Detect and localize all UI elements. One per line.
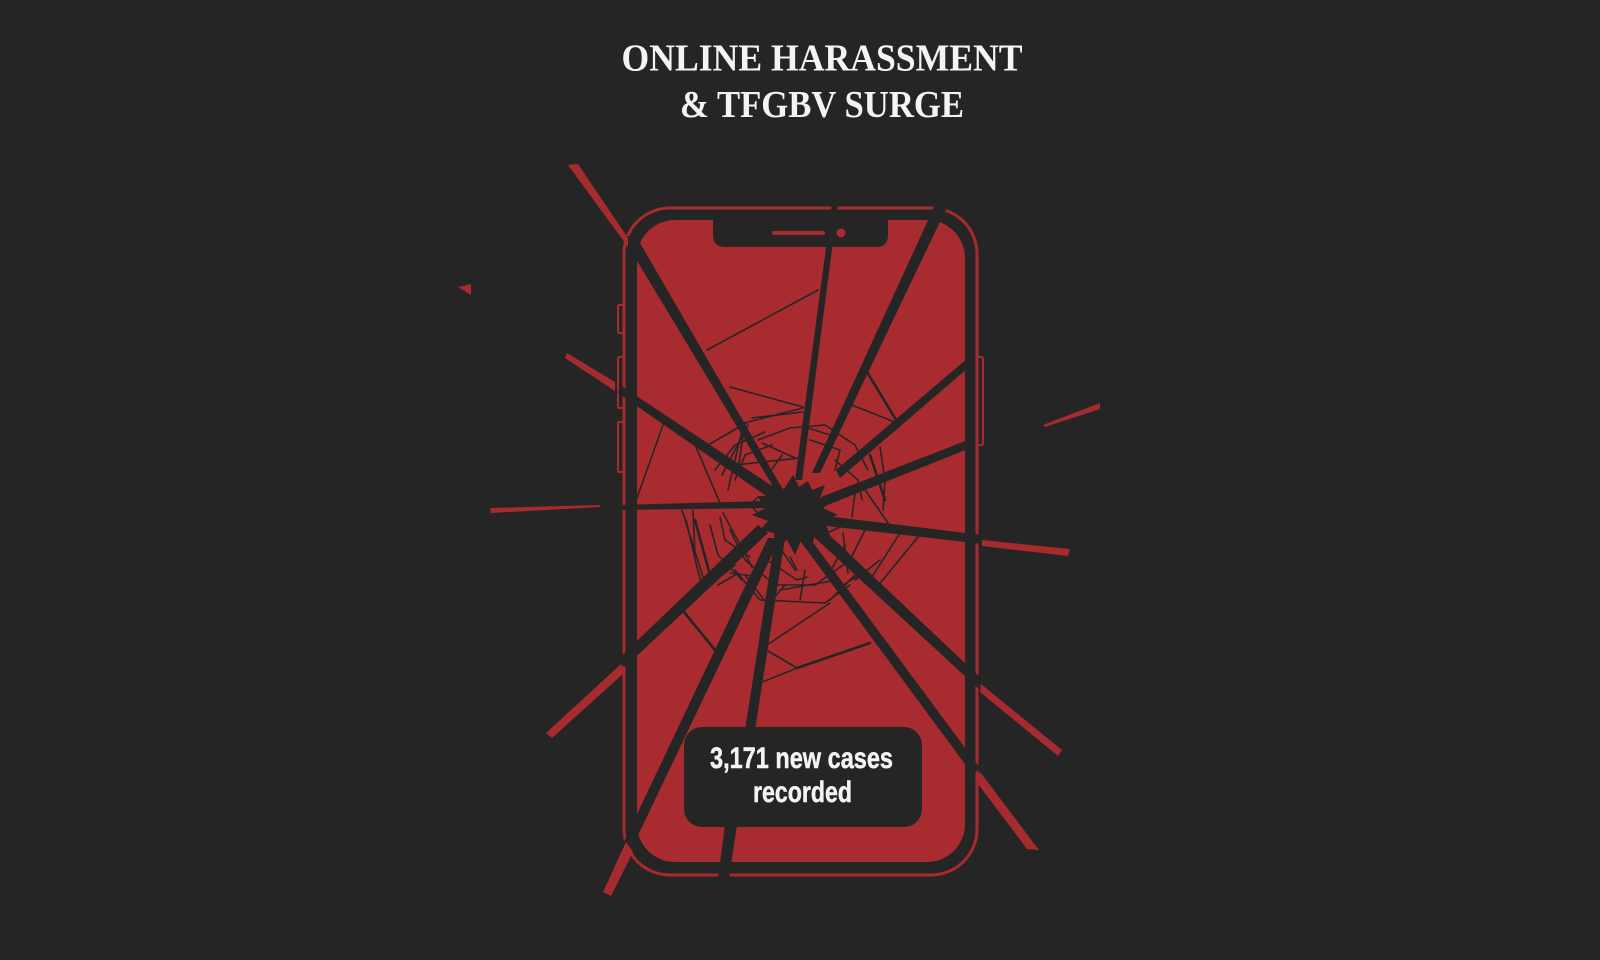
callout: new cases (684, 727, 922, 827)
phone outer outline (624, 208, 977, 875)
flying shards outside the phone (458, 164, 1100, 896)
impact point starburst (752, 475, 838, 555)
fine cracks web (637, 290, 918, 683)
main radial cracks (617, 203, 985, 878)
phone side buttons (618, 305, 983, 472)
icon: shattered phone (458, 164, 1100, 896)
callout: new cases: recorded (753, 776, 852, 809)
phone screen (637, 220, 965, 862)
title: & TFGBV SURGE (680, 84, 964, 126)
title (622, 38, 1022, 126)
phone notch (713, 218, 888, 247)
callout: new cases: 3,171 new cases (710, 742, 893, 775)
speaker and camera (772, 228, 846, 238)
title: ONLINE HARASSMENT (622, 38, 1022, 80)
